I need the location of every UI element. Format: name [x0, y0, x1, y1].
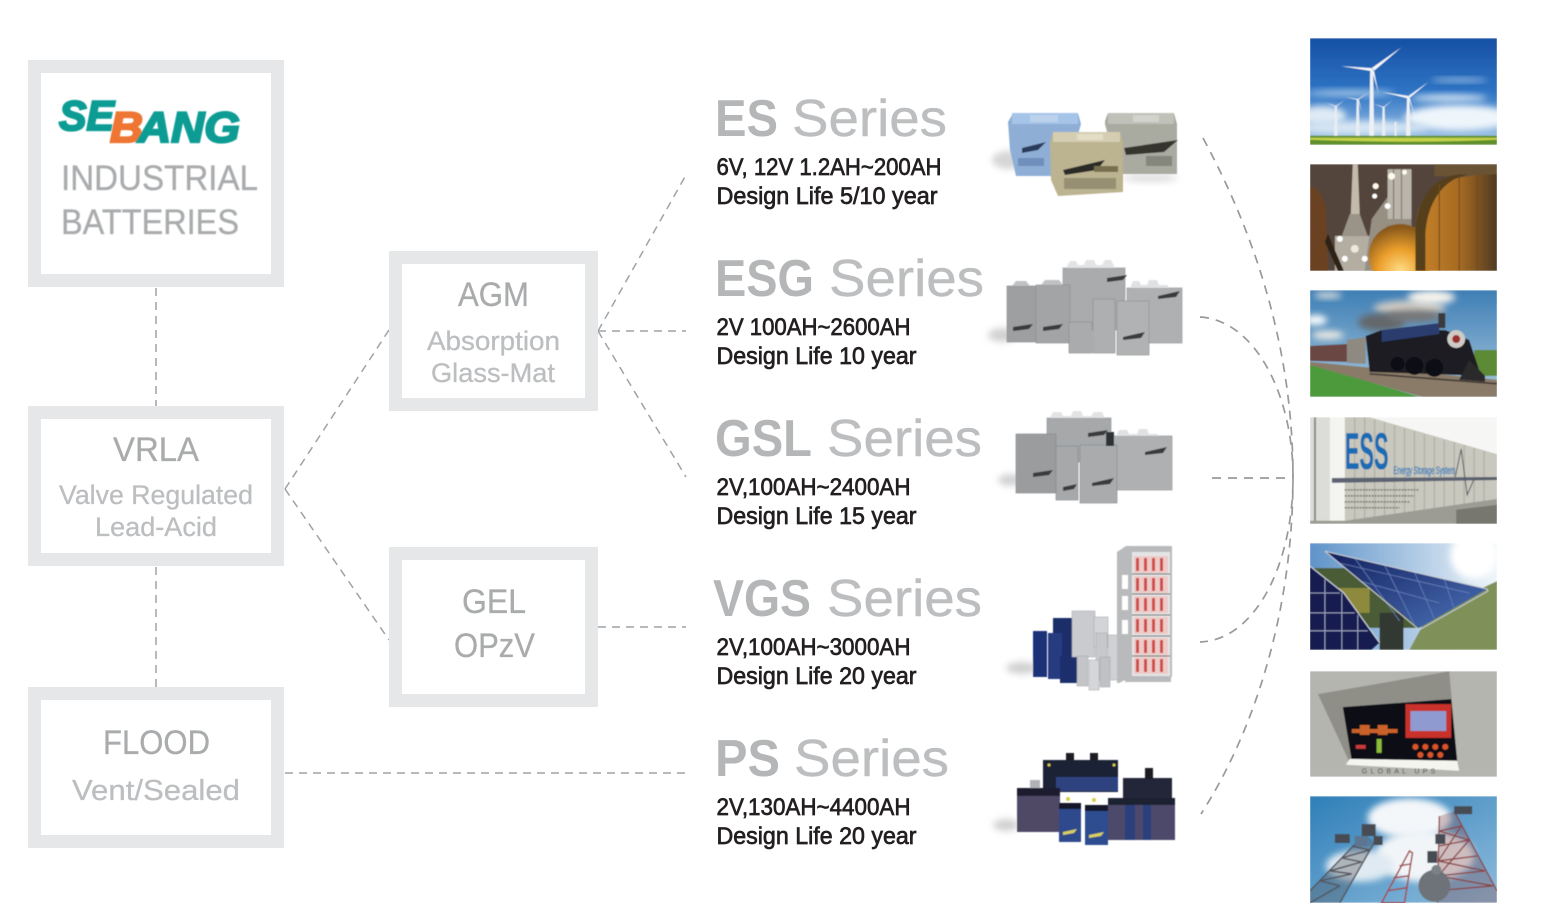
photo: ESS container: ESS — [1345, 422, 1389, 480]
panel: FLOOD — [34, 694, 278, 842]
series: VGS: 2V,100AH~3000AH — [716, 634, 910, 661]
series: ESG — [715, 250, 984, 370]
heading: industrial batteries — [61, 159, 258, 242]
product image: GSL batteries — [998, 411, 1172, 503]
product image: VGS batteries and rack — [1006, 546, 1172, 690]
panel: AGM: Glass-Mat — [431, 358, 555, 388]
panel: GEL OPzV: OPzV — [454, 627, 535, 665]
panel: VRLA: Lead-Acid — [95, 512, 217, 542]
panel: AGM: AGM — [458, 276, 529, 314]
series: PS: Series — [794, 730, 949, 788]
product image: ESG batteries — [988, 260, 1182, 355]
product image: ES batteries — [992, 113, 1178, 196]
series: ES: 6V, 12V 1.2AH~200AH — [716, 154, 942, 181]
series: ES: Series — [792, 90, 947, 148]
photo: refinery — [1310, 164, 1497, 271]
panel: FLOOD: Vent/Sealed — [72, 775, 240, 807]
series: PS: PS — [715, 730, 780, 788]
series: VGS: VGS — [713, 570, 811, 628]
series: ESG: Design Life 10 year — [716, 343, 916, 370]
panel: GEL OPzV: GEL — [462, 583, 526, 621]
panel: VRLA — [34, 412, 278, 560]
panel: VRLA: VRLA — [113, 431, 199, 469]
series: PS — [715, 730, 949, 850]
series: PS: Design Life 20 year — [716, 823, 916, 850]
logo: SEBANG: B — [110, 104, 143, 152]
panel: AGM: Absorption — [427, 326, 560, 356]
logo: SEBANG — [59, 92, 240, 152]
series: VGS: Design Life 20 year — [716, 663, 916, 690]
application bracket curves — [1200, 138, 1293, 814]
series: ES: Design Life 5/10 year — [716, 183, 938, 210]
connector lines — [156, 175, 686, 773]
series: VGS: Series — [827, 570, 982, 628]
photo: UPS control panel — [1310, 671, 1497, 777]
product image: PS batteries — [993, 753, 1175, 845]
series: ES — [715, 90, 947, 210]
logo: SEBANG: SE — [59, 92, 116, 139]
panel: Sebang industrial batteries — [34, 66, 278, 280]
logo: SEBANG: ANG — [137, 104, 240, 152]
series: ES: ES — [715, 90, 778, 148]
photo: telecom towers — [1310, 796, 1497, 903]
photo: ESS container — [1310, 417, 1497, 524]
series: ESG: Series — [829, 250, 984, 308]
series: GSL: Series — [827, 410, 982, 468]
photo: solar panels — [1310, 543, 1497, 650]
heading: industrial batteries: BATTERIES — [61, 203, 239, 242]
photo: UPS control panel: GLOBAL UPS — [1362, 769, 1436, 776]
series: GSL: 2V,100AH~2400AH — [716, 474, 910, 501]
series: GSL: GSL — [715, 410, 812, 468]
panel: VRLA: Valve Regulated — [59, 480, 253, 510]
photo: steam train — [1310, 290, 1497, 397]
panel: FLOOD: FLOOD — [103, 724, 210, 762]
series: GSL: Design Life 15 year — [716, 503, 916, 530]
heading: industrial batteries: INDUSTRIAL — [61, 159, 258, 198]
series: ESG: 2V 100AH~2600AH — [716, 314, 910, 341]
panel: AGM — [396, 258, 592, 404]
photo: wind turbines — [1310, 38, 1497, 145]
series: GSL — [715, 410, 982, 530]
series: ESG: ESG — [715, 250, 814, 308]
panel: GEL OPzV — [396, 554, 592, 700]
series: PS: 2V,130AH~4400AH — [716, 794, 910, 821]
series: VGS — [713, 570, 982, 690]
